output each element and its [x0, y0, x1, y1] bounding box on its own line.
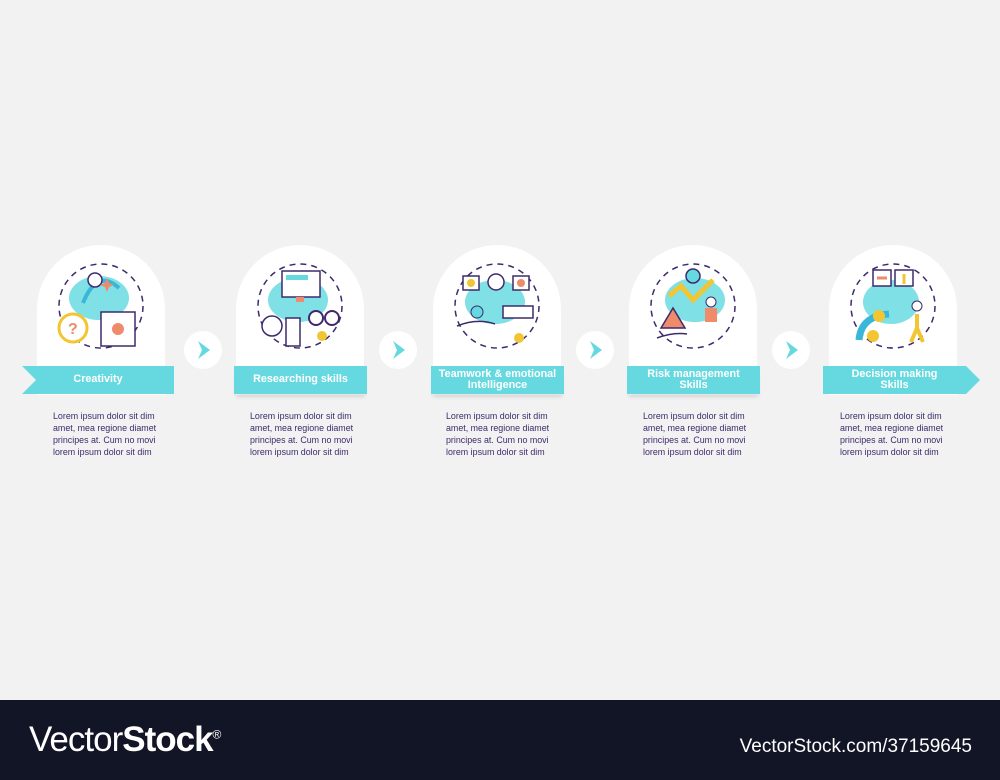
footer	[0, 700, 1000, 780]
ribbon: decision: Skills	[880, 379, 909, 391]
ribbon: teamwork	[431, 366, 564, 394]
arrow 1	[184, 331, 222, 369]
icon: creativity	[58, 263, 144, 349]
ribbon: risk: Skills	[679, 379, 708, 391]
icon: teamwork	[454, 263, 540, 349]
icon: risk	[650, 263, 736, 349]
panel: risk	[629, 245, 757, 395]
ribbon: researching	[234, 366, 367, 394]
ribbon: decision: Decision making	[852, 368, 937, 380]
panel: decision	[829, 245, 957, 395]
text: teamwork: Lorem ipsum dolor sit dim amet, mea regione diamet principes at. Cum no movi lorem ipsum dolor sit dim	[446, 411, 549, 457]
panel: creativity	[37, 245, 165, 395]
logo: VectorStock®	[29, 720, 220, 759]
panel: teamwork	[433, 245, 561, 395]
arrow 4	[772, 331, 810, 369]
icon: researching	[257, 263, 343, 349]
ribbon: creativity	[22, 366, 174, 394]
ribbon: researching: Researching skills	[253, 373, 348, 385]
icon: creativity: ?	[68, 321, 78, 338]
text: risk: Lorem ipsum dolor sit dim amet, mea regione diamet principes at. Cum no movi lorem ipsum dolor sit dim	[643, 411, 746, 457]
url: VectorStock.com/37159645	[740, 736, 972, 757]
arrow 3	[576, 331, 614, 369]
text: decision: Lorem ipsum dolor sit dim amet, mea regione diamet principes at. Cum no movi lorem ipsum dolor sit dim	[840, 411, 943, 457]
ribbon: teamwork: Intelligence	[468, 379, 527, 391]
ribbon: risk: Risk management	[647, 368, 740, 380]
text: creativity: Lorem ipsum dolor sit dim amet, mea regione diamet principes at. Cum no movi lorem ipsum dolor sit dim	[53, 411, 156, 457]
ribbon: creativity: Creativity	[73, 373, 123, 385]
ribbon: teamwork: Teamwork & emotional	[439, 368, 556, 380]
ribbon: risk	[627, 366, 760, 394]
ribbon: decision	[823, 366, 980, 394]
panel: researching	[236, 245, 364, 395]
text: researching: Lorem ipsum dolor sit dim amet, mea regione diamet principes at. Cum no movi lorem ipsum dolor sit dim	[250, 411, 353, 457]
arrow 2	[379, 331, 417, 369]
icon: decision	[850, 263, 936, 349]
